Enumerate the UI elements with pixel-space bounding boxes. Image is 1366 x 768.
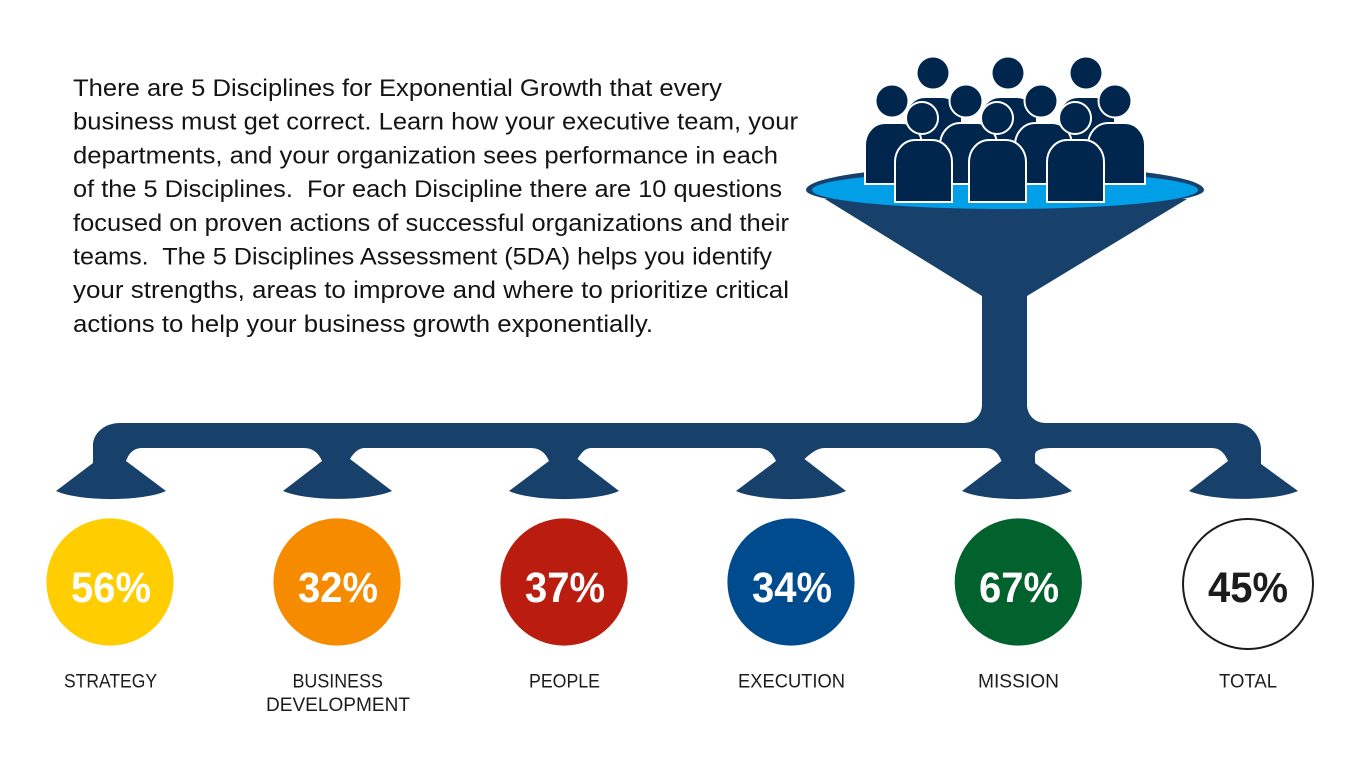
- score: strategy: STRATEGY: [64, 672, 157, 692]
- intro text block: There are 5 Disciplines for Exponential Growth that every: [73, 75, 723, 102]
- intro text block: teams. The 5 Disciplines Assessment (5DA) helps you identify: [73, 244, 773, 270]
- score: total: 45%: [1208, 564, 1288, 612]
- score: execution: 34%: [752, 564, 832, 612]
- score: people: 37%: [525, 564, 605, 612]
- score: business development: BUSINESS: [292, 672, 383, 692]
- intro text block: your strengths, areas to improve and where to prioritize critical: [73, 277, 789, 304]
- funnel opening: [812, 171, 1198, 209]
- score: business development: [266, 518, 410, 716]
- intro text block: of the 5 Disciplines. For each Discipline there are 10 questions: [73, 176, 782, 203]
- score: people: [500, 518, 628, 692]
- intro text block: [73, 75, 798, 338]
- funnel rim: [806, 165, 1204, 210]
- score: strategy: 56%: [71, 564, 151, 612]
- score: business development: 32%: [298, 564, 378, 612]
- funnel: [806, 165, 1204, 296]
- score: mission: MISSION: [978, 672, 1059, 692]
- distribution pipe with six nozzles: [56, 290, 1298, 499]
- intro text block: business must get correct. Learn how your executive team, your: [73, 109, 798, 136]
- score: people: PEOPLE: [529, 672, 600, 692]
- intro text block: actions to help your business growth exponentially.: [73, 311, 653, 338]
- score: execution: EXECUTION: [738, 672, 845, 692]
- score: mission: 67%: [979, 564, 1059, 612]
- score: total: TOTAL: [1219, 672, 1277, 692]
- score: strategy: [46, 518, 174, 692]
- intro text block: departments, and your organization sees performance in each: [73, 142, 778, 169]
- score: execution: [727, 518, 855, 692]
- intro text block: focused on proven actions of successful organizations and their: [73, 210, 789, 237]
- funnel cone: [825, 199, 1187, 296]
- score: mission: [955, 518, 1082, 692]
- score: business development: DEVELOPMENT: [266, 695, 410, 716]
- score: total: [1183, 519, 1313, 692]
- icon: group of people: [865, 58, 1145, 202]
